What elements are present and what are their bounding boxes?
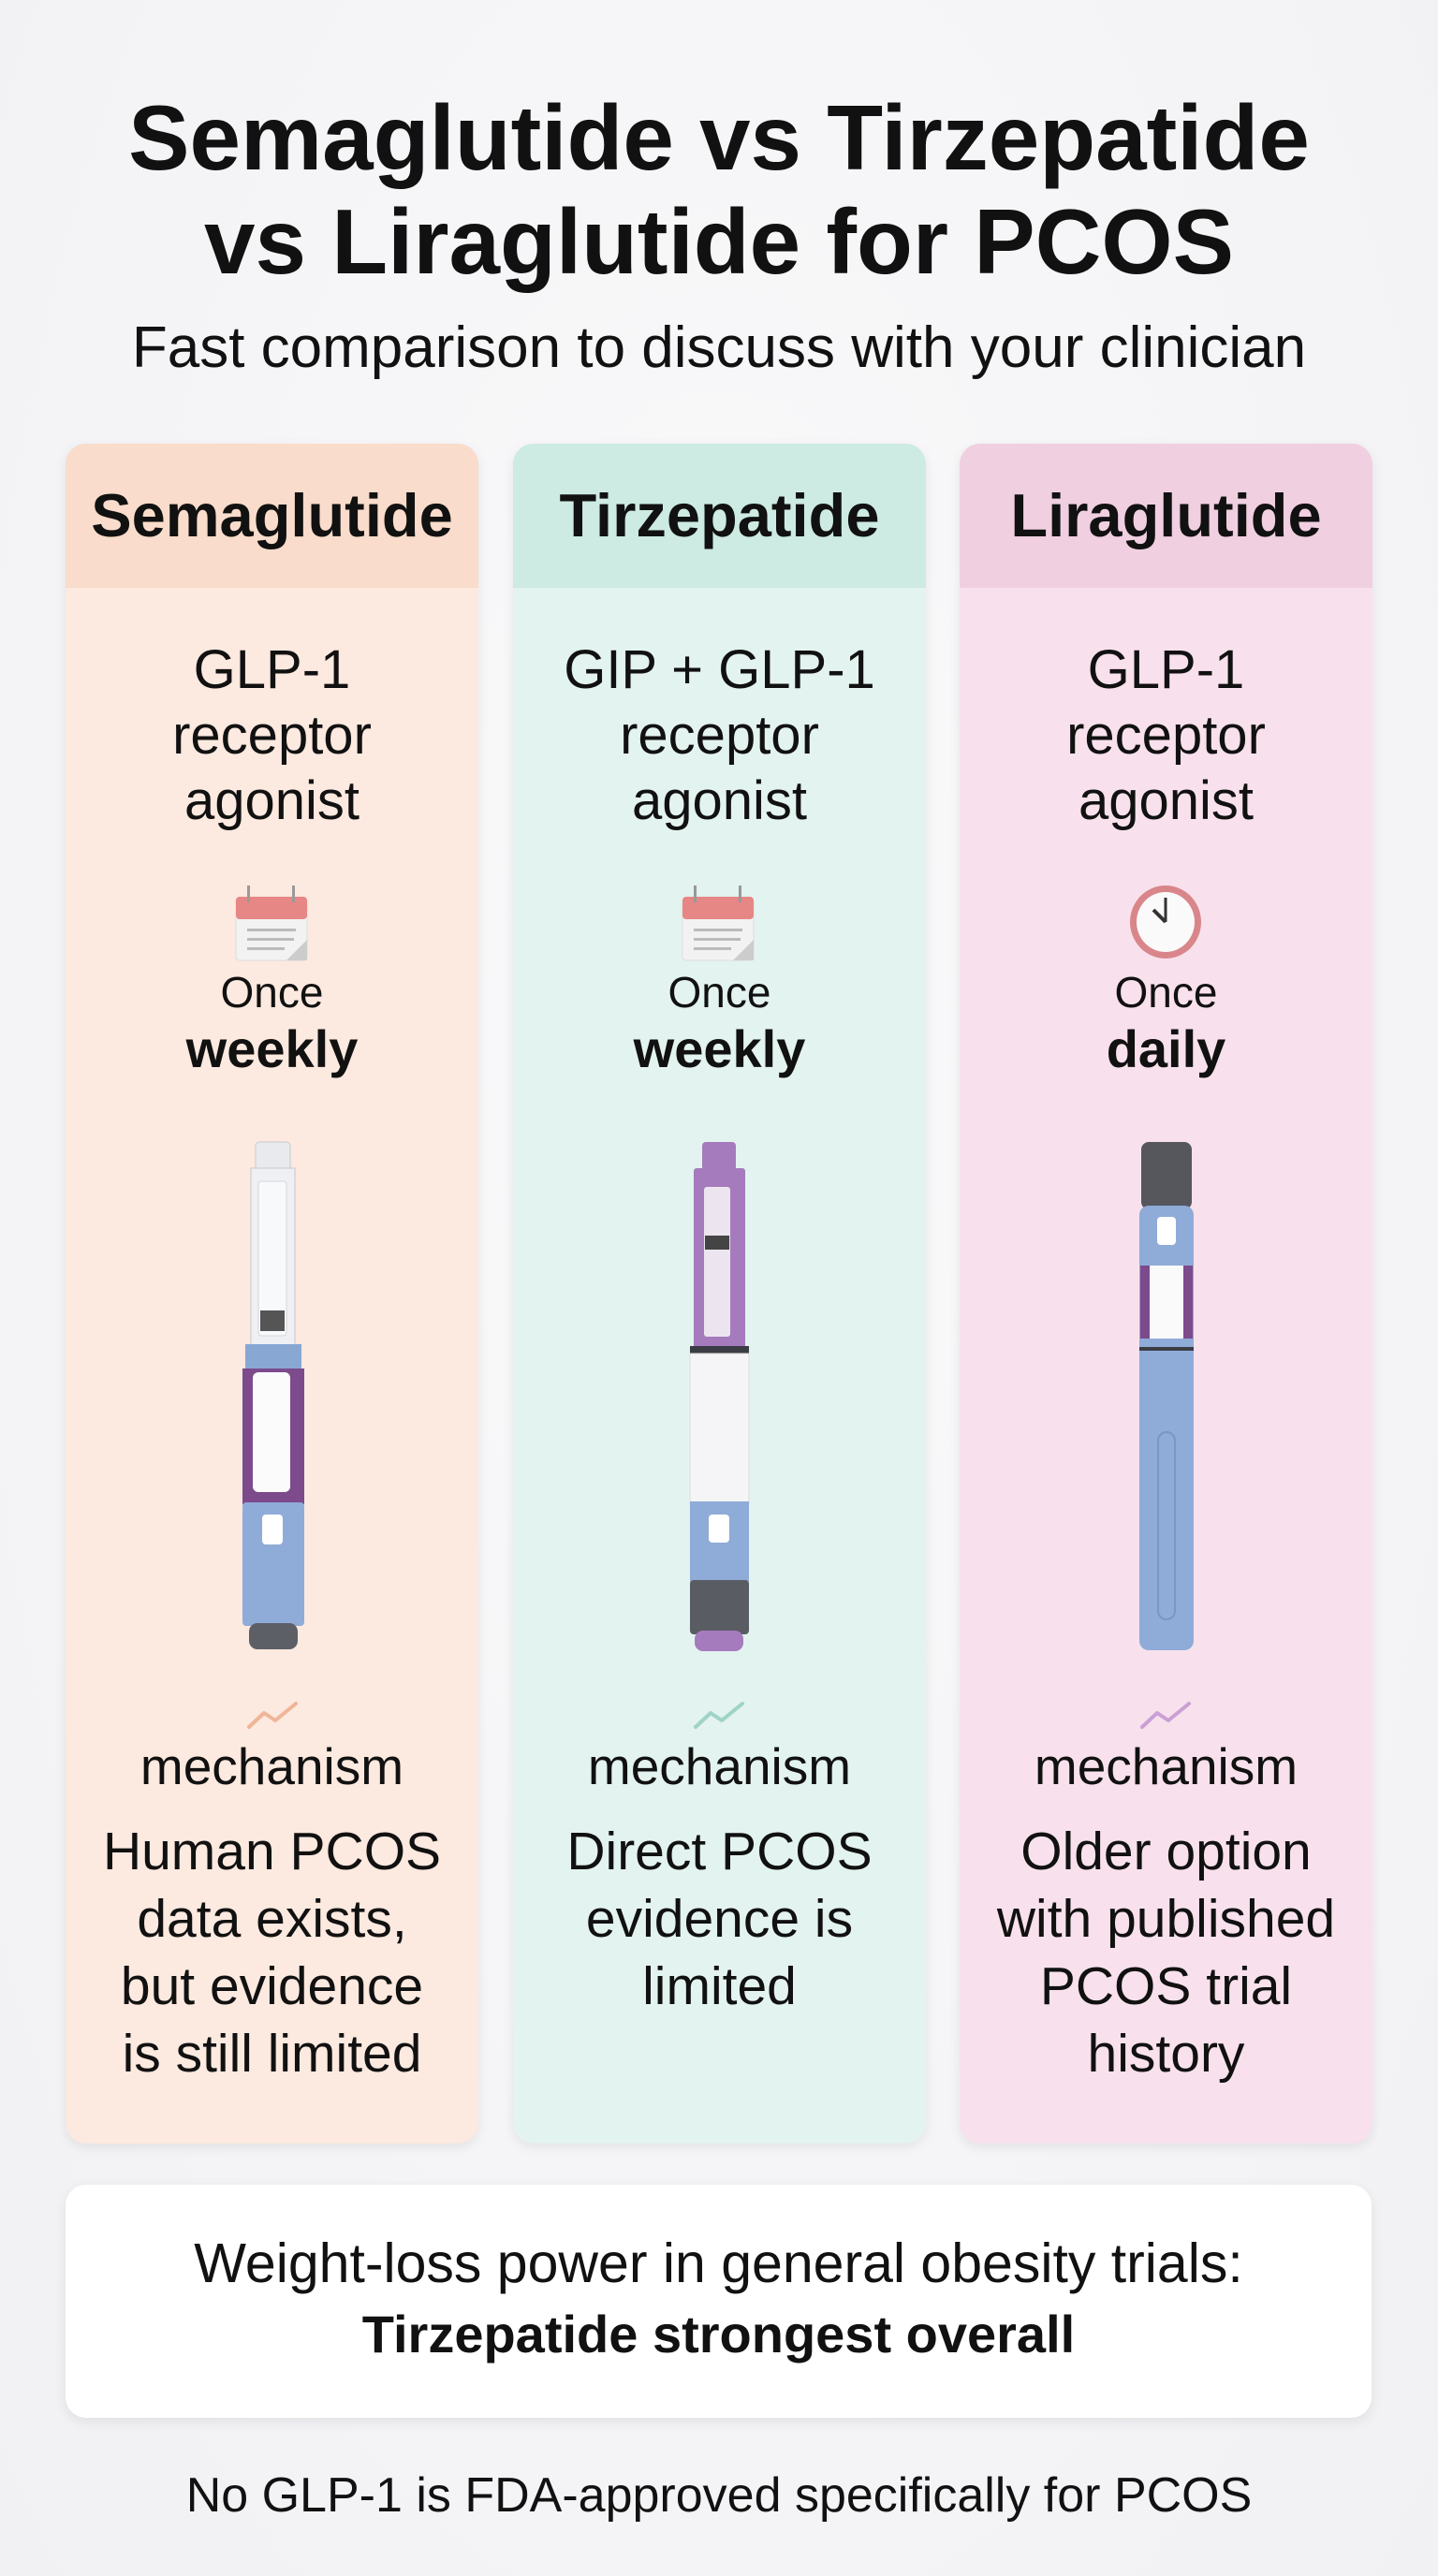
dosing: once daily: Once [1115, 968, 1217, 1017]
mechanism text: receptor [1066, 705, 1266, 766]
evidence text: history [1088, 2024, 1244, 2084]
pen: liraglutide [1139, 1142, 1194, 1650]
dosing: once daily: daily [1107, 1019, 1225, 1078]
header: liraglutide [960, 444, 1372, 588]
header: tirzepatide: Tirzepatide [560, 481, 879, 549]
icon: calendar semaglutide [236, 886, 307, 960]
evidence text: is still limited [123, 2024, 421, 2084]
mechanism text: agonist [1078, 770, 1254, 831]
dosing: once daily [1107, 968, 1225, 1078]
dosing: once weekly [185, 968, 358, 1078]
dosing: once weekly: weekly [634, 1019, 805, 1078]
evidence text: Older option [1020, 1822, 1312, 1881]
panel: tirzepatide [513, 444, 926, 2144]
mechanism text: agonist [632, 770, 807, 831]
pen: semaglutide [242, 1142, 304, 1649]
mechanism text: receptor [620, 705, 819, 766]
icon: trend tirzepatide [696, 1704, 742, 1727]
mechanism text: GLP-1 [194, 639, 350, 700]
dosing: once weekly [633, 968, 805, 1078]
mechanism text: agonist [184, 770, 360, 831]
mechanism label: mechanism [588, 1737, 851, 1795]
title [128, 86, 1310, 293]
evidence text: with published [997, 1889, 1335, 1949]
mechanism text: GLP-1 [1088, 639, 1244, 700]
callout: weight-loss summary: Tirzepatide strongest overall [362, 2305, 1075, 2364]
evidence text: PCOS trial [1040, 1956, 1292, 2016]
icon: calendar tirzepatide [682, 886, 754, 960]
mechanism text: receptor [172, 705, 372, 766]
title: vs Liraglutide for PCOS [204, 190, 1234, 293]
evidence text: evidence is [586, 1889, 853, 1949]
evidence text [566, 1822, 873, 2016]
panel: liraglutide [960, 444, 1372, 2144]
panel: semaglutide [66, 444, 478, 2144]
subtitle: Fast comparison to discuss with your clinician [132, 315, 1306, 380]
callout: weight-loss summary [66, 2185, 1372, 2418]
evidence text [103, 1822, 441, 2084]
dosing: once weekly: weekly [186, 1019, 358, 1078]
evidence text: data exists, [137, 1889, 407, 1949]
header: liraglutide: Liraglutide [1010, 481, 1322, 549]
mechanism label: mechanism [140, 1737, 404, 1795]
evidence text [996, 1822, 1335, 2084]
evidence text: Direct PCOS [566, 1822, 873, 1881]
header: semaglutide [66, 444, 478, 588]
evidence text: Human PCOS [103, 1822, 441, 1881]
mechanism text [564, 639, 875, 831]
mechanism text [172, 639, 372, 831]
title: Semaglutide vs Tirzepatide [128, 86, 1310, 189]
mechanism text [1066, 639, 1266, 831]
header: tirzepatide [513, 444, 926, 588]
footer note: No GLP-1 is FDA-approved specifically for PCOS [186, 2468, 1252, 2523]
icon: clock liraglutide [1130, 886, 1201, 959]
pen: tirzepatide [690, 1142, 749, 1651]
mechanism label: mechanism [1034, 1737, 1298, 1795]
evidence text: but evidence [121, 1956, 423, 2016]
icon: trend semaglutide [249, 1704, 296, 1727]
dosing: once weekly: Once [221, 968, 323, 1017]
icon: trend liraglutide [1142, 1704, 1189, 1727]
callout: weight-loss summary: Weight-loss power in general obesity trials: [194, 2232, 1243, 2294]
evidence text: limited [642, 1956, 797, 2016]
header: semaglutide: Semaglutide [91, 481, 453, 549]
dosing: once weekly: Once [668, 968, 770, 1017]
mechanism text: GIP + GLP-1 [564, 639, 875, 700]
